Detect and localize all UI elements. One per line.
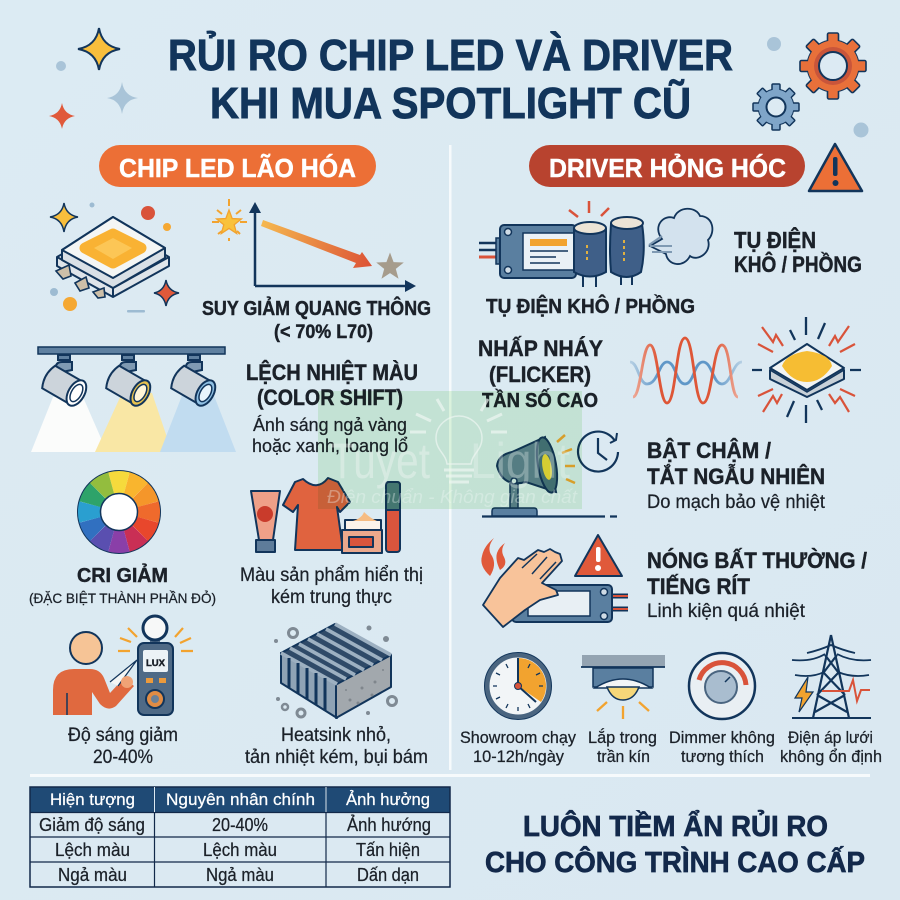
panel: chip LED heading: CHIP LED LÃO HÓA bbox=[119, 153, 356, 183]
text: heatsink bbox=[245, 725, 428, 768]
text: heatsink: tản nhiệt kém, bụi bám bbox=[245, 747, 428, 768]
panel: driver heading: DRIVER HỎNG HÓC bbox=[549, 152, 786, 183]
text: heatsink: Heatsink nhỏ, bbox=[281, 725, 391, 746]
table: symptoms, causes, impact: 20-40% bbox=[212, 815, 268, 835]
icon: dusty heatsink bbox=[274, 624, 396, 718]
text: bottom icon captions: Lắp trong bbox=[588, 728, 657, 747]
text: bottom icon captions: trần kín bbox=[597, 747, 650, 766]
text: delayed start: BẬT CHẬM / bbox=[647, 438, 771, 463]
table: symptoms, causes, impact: Ảnh hướng bbox=[347, 814, 431, 835]
table: symptoms, causes, impact: Ảnh hưởng bbox=[346, 790, 430, 809]
text: product colors: Màu sản phẩm hiển thị bbox=[240, 565, 423, 586]
callout: closing statement: CHO CÔNG TRÌNH CAO CẤP bbox=[485, 845, 865, 879]
icon: recessed ceiling lamp bbox=[581, 655, 665, 719]
watermark: Tuyet Light logo: Điện chuẩn - Không gian chất bbox=[327, 487, 578, 507]
text: overheating: TIẾNG RÍT bbox=[647, 574, 751, 599]
table: symptoms, causes, impact bbox=[30, 787, 450, 887]
text: bottom icon captions: tương thích bbox=[681, 747, 764, 766]
table: symptoms, causes, impact: Tấn hiện bbox=[356, 840, 420, 860]
table: symptoms, causes, impact: Nguyên nhân chính bbox=[166, 790, 315, 809]
icon: spotlight with clock bbox=[482, 432, 618, 516]
chart: lumen depreciation bbox=[212, 199, 416, 292]
title: RỦI RO CHIP LED VÀ DRIVER bbox=[168, 29, 733, 80]
text: capacitor side label: TỤ ĐIỆN bbox=[734, 226, 816, 253]
text: bottom icon captions: Điện áp lưới bbox=[788, 728, 873, 747]
text: CRI: CRI GIẢM bbox=[77, 564, 168, 587]
table: symptoms, causes, impact: Dấn dạn bbox=[357, 865, 419, 885]
callout: closing statement bbox=[485, 809, 865, 879]
text: bottom icon captions: Dimmer không bbox=[669, 728, 775, 747]
icon: clock 10-12h bbox=[484, 652, 552, 720]
text: flicker bbox=[478, 336, 603, 412]
text: flicker: (FLICKER) bbox=[489, 362, 591, 387]
text: lumen depreciation: SUY GIẢM QUANG THÔNG bbox=[202, 296, 431, 320]
table: symptoms, causes, impact: Lệch màu bbox=[203, 840, 277, 860]
icon: products bbox=[251, 478, 400, 553]
icon: driver with capacitors and smoke bbox=[479, 201, 712, 287]
panel: chip LED heading bbox=[99, 145, 376, 187]
table: symptoms, causes, impact: Lệch màu bbox=[55, 840, 130, 860]
callout: closing statement: LUÔN TIỀM ẨN RỦI RO bbox=[523, 809, 828, 843]
text: capacitor side label: KHÔ / PHỒNG bbox=[734, 252, 862, 277]
icon: dimmer knob bbox=[689, 653, 755, 719]
text: color shift: (COLOR SHIFT) bbox=[257, 385, 403, 410]
title bbox=[168, 29, 733, 128]
text: product colors: kém trung thực bbox=[271, 587, 392, 608]
text: brightness: Độ sáng giảm bbox=[68, 725, 178, 746]
text: brightness bbox=[68, 725, 178, 768]
title: KHI MUA SPOTLIGHT CŨ bbox=[210, 78, 691, 128]
text: overheating: Linh kiện quá nhiệt bbox=[647, 601, 806, 622]
panel: chip LED aging bbox=[29, 199, 431, 768]
text: CRI bbox=[29, 564, 216, 606]
text: lumen depreciation bbox=[202, 296, 431, 343]
icon: person with lux meter bbox=[53, 616, 193, 715]
text: brightness: 20-40% bbox=[93, 747, 153, 768]
icon: decorative sparkles bbox=[49, 28, 138, 129]
table: symptoms, causes, impact: Hiện tượng bbox=[50, 790, 135, 809]
icon: warning triangle bbox=[809, 144, 862, 191]
icon: power tower bbox=[792, 635, 871, 718]
text: bottom icon captions: 10-12h/ngày bbox=[473, 747, 564, 766]
icon: gears bbox=[753, 33, 868, 138]
text: product colors bbox=[240, 565, 423, 608]
text: color shift: Ánh sáng ngả vàng bbox=[253, 415, 407, 435]
icon: track lights bbox=[31, 347, 236, 452]
table: symptoms, causes, impact: Ngả màu bbox=[206, 865, 274, 885]
icon: flickering LED chip bbox=[752, 317, 861, 423]
text: color shift: hoặc xanh, loang lổ bbox=[252, 436, 408, 456]
icon: person with lux meter: LUX bbox=[146, 658, 166, 669]
text: lumen depreciation: (< 70% L70) bbox=[274, 322, 373, 343]
watermark: Tuyet Light logo: Tuyet bbox=[330, 433, 430, 489]
panel: driver heading bbox=[529, 145, 805, 187]
watermark: Tuyet Light logo bbox=[318, 391, 582, 509]
watermark: Tuyet Light logo: Light bbox=[470, 433, 570, 489]
icon: LED chip bbox=[50, 202, 179, 312]
text: delayed start bbox=[647, 438, 826, 513]
icon: hand on hot driver bbox=[481, 535, 628, 627]
text: bottom icon captions: không ổn định bbox=[780, 747, 882, 766]
text: CRI: (ĐẶC BIỆT THÀNH PHẦN ĐỎ) bbox=[29, 589, 216, 606]
text: capacitor side label bbox=[734, 226, 862, 277]
text: color shift: LỆCH NHIỆT MÀU bbox=[246, 360, 418, 385]
chart: flicker waves bbox=[630, 338, 742, 403]
icon: color wheel bbox=[78, 471, 160, 553]
text: delayed start: TẮT NGẪU NHIÊN bbox=[647, 463, 825, 489]
table: symptoms, causes, impact: Giảm độ sáng bbox=[39, 815, 145, 835]
text: color shift bbox=[246, 360, 418, 456]
text: bottom icon captions: Showroom chạy bbox=[460, 728, 576, 747]
text: overheating: NÓNG BẤT THƯỜNG / bbox=[647, 548, 867, 573]
panel: driver failures bbox=[460, 201, 882, 766]
text: overheating bbox=[647, 548, 867, 622]
text: flicker: TẦN SỐ CAO bbox=[482, 388, 598, 412]
text: delayed start: Do mạch bảo vệ nhiệt bbox=[647, 492, 826, 513]
text: flicker: NHẤP NHÁY bbox=[478, 336, 603, 361]
text: capacitor caption: TỤ ĐIỆN KHÔ / PHỒNG bbox=[486, 294, 695, 318]
table: symptoms, causes, impact: Ngả màu bbox=[58, 865, 127, 885]
text: bottom icon captions bbox=[460, 728, 882, 766]
